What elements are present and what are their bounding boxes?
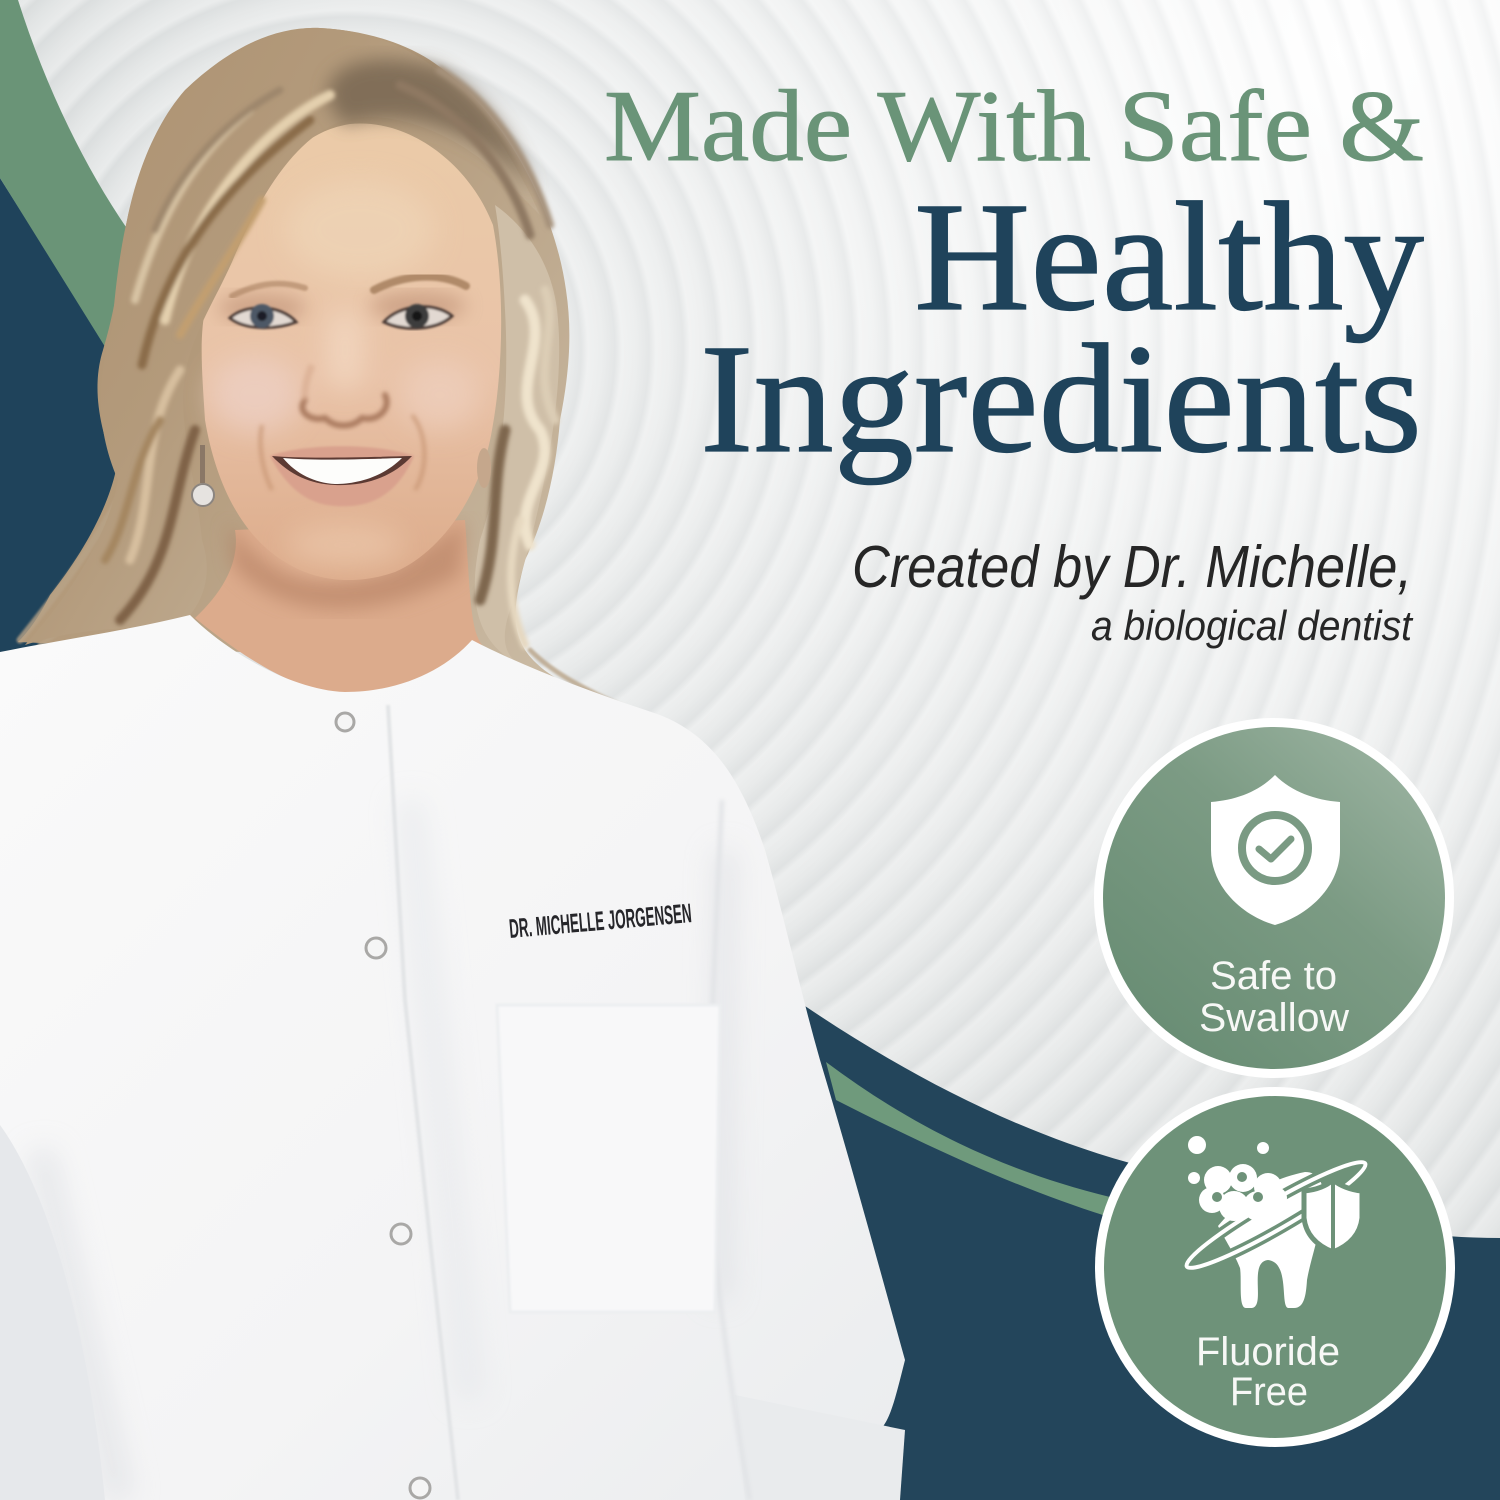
badge label — [1196, 1330, 1340, 1414]
bottom right navy wave with green stripe — [805, 1006, 1500, 1500]
badge label: Swallow — [1199, 996, 1349, 1040]
creator line: Created by Dr. Michelle, — [852, 534, 1412, 600]
subheading — [852, 534, 1414, 649]
buttons — [336, 713, 430, 1498]
sleeve seam — [711, 800, 750, 1500]
icon: tooth with foam and shield — [1180, 1136, 1372, 1308]
heading — [604, 70, 1424, 485]
eye socket shading — [218, 291, 466, 323]
left navy and green swoosh — [0, 0, 140, 680]
badge label: Safe to — [1210, 954, 1337, 998]
white coat — [0, 615, 905, 1500]
cheek highlights — [210, 180, 480, 567]
badge label: Free — [1230, 1370, 1308, 1414]
coat soft folds — [40, 800, 725, 1500]
badge label — [1199, 954, 1349, 1040]
eyes — [230, 304, 452, 328]
right undersleeve cuff — [735, 1395, 905, 1500]
heading line 2: Healthy — [914, 170, 1424, 343]
badge: safe to swallow — [1094, 718, 1454, 1078]
eyebrows — [232, 277, 466, 296]
portrait: dentist in white coat: DR. MICHELLE JORGENSEN — [508, 898, 693, 944]
coat placket — [388, 705, 458, 1500]
hair strands — [105, 70, 555, 645]
earrings — [192, 445, 491, 506]
portrait: dentist in white coat — [0, 28, 905, 1500]
smile lines — [260, 415, 424, 490]
smile — [270, 446, 414, 506]
hair back — [18, 28, 630, 712]
left sleeve shading — [0, 1125, 105, 1500]
neck shadow — [228, 520, 466, 610]
pocket — [497, 1005, 720, 1312]
icon: shield with check — [1211, 775, 1340, 925]
heading line 1: Made With Safe & — [604, 70, 1424, 183]
nose — [302, 365, 387, 426]
badge: fluoride free — [1095, 1087, 1455, 1447]
face — [202, 123, 501, 580]
front hair sweep — [25, 28, 540, 645]
heading line 3: Ingredients — [700, 312, 1422, 485]
neck — [195, 520, 482, 696]
dark roots — [328, 60, 535, 195]
right curls — [475, 205, 559, 665]
hair wisps over navy — [20, 500, 632, 712]
badge label: Fluoride — [1196, 1330, 1340, 1374]
role line: a biological dentist — [1091, 602, 1414, 649]
